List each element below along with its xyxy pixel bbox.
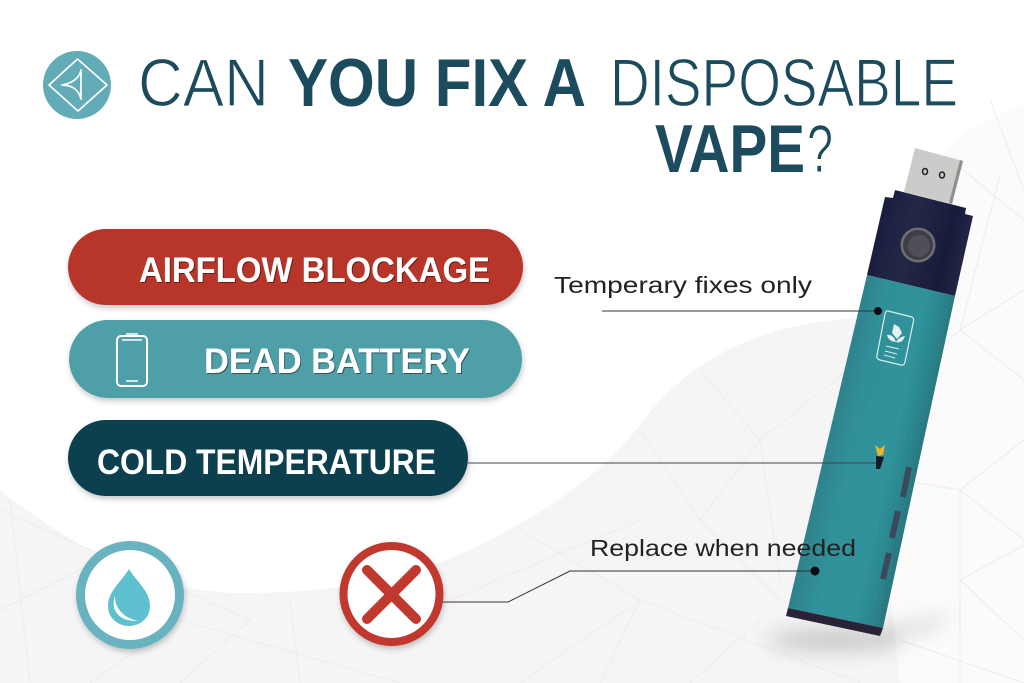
pill: dead battery <box>69 320 522 398</box>
side vents <box>883 467 909 579</box>
pill: cold temperature: COLD TEMPERATURE <box>97 443 436 482</box>
teal body <box>788 275 955 628</box>
usb connector <box>904 148 963 204</box>
title: ? <box>807 111 833 187</box>
title <box>138 45 958 187</box>
product label icon <box>877 311 914 365</box>
vape shadow <box>767 612 955 650</box>
pill: cold temperature <box>68 420 468 496</box>
icon: cross <box>344 546 440 642</box>
flame mark <box>875 445 885 469</box>
title: VAPE <box>655 111 805 187</box>
navy cap <box>867 190 973 296</box>
pill: airflow blockage <box>68 229 523 305</box>
pill: airflow blockage: AIRFLOW BLOCKAGE <box>139 251 490 290</box>
title: CAN <box>138 45 269 121</box>
connector: cold temperature <box>468 462 876 464</box>
callout: replace when needed: Replace when needed <box>590 535 856 561</box>
callout: temporary fixes: Temperary fixes only <box>554 272 813 298</box>
title: YOU FIX A <box>288 45 586 121</box>
vape device <box>786 148 973 636</box>
icon: water drop <box>80 546 180 644</box>
logo icon <box>43 51 111 119</box>
base ring <box>786 608 883 636</box>
callout: temporary fixes <box>554 272 882 315</box>
pill: dead battery: DEAD BATTERY <box>204 342 470 381</box>
callout: replace when needed <box>443 535 856 602</box>
icon: battery <box>117 334 147 386</box>
